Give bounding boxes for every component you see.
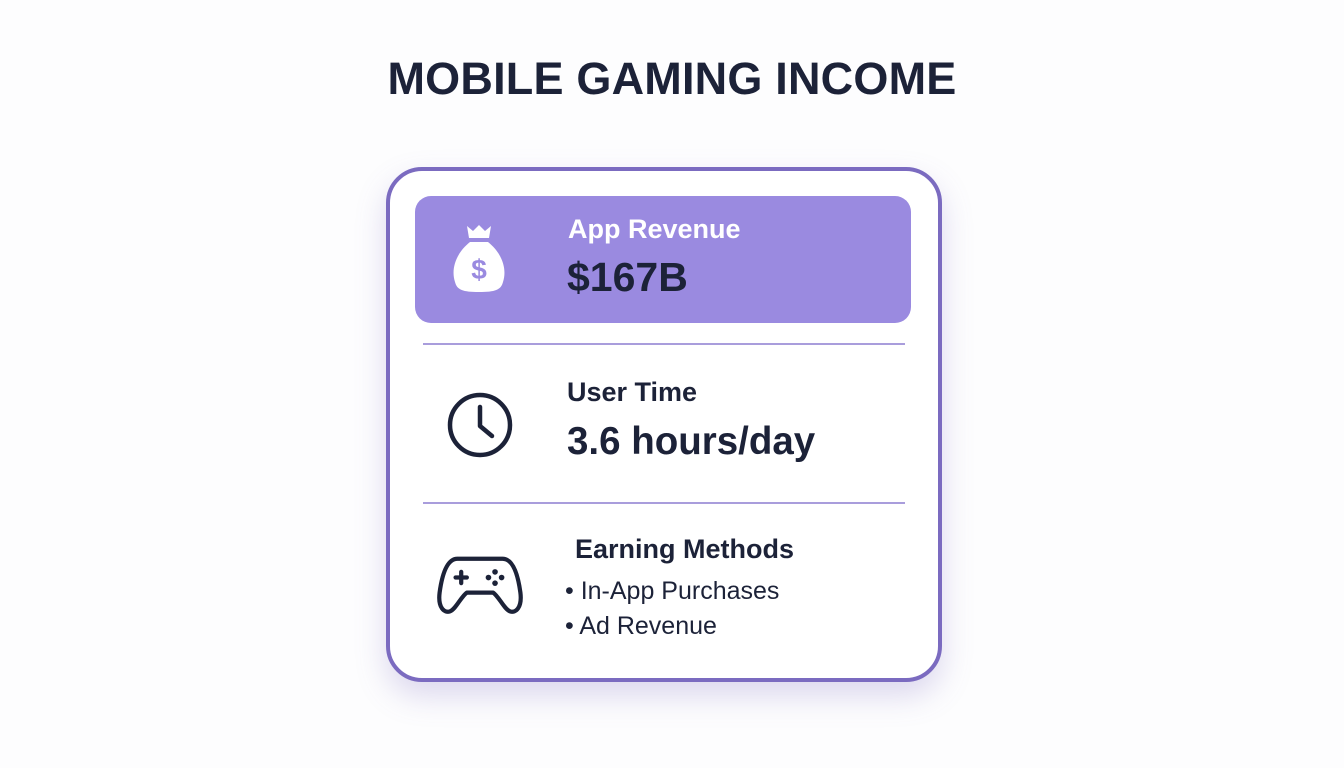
value: hours: 3.6 hours/day <box>567 420 815 463</box>
label: earning methods: Earning Methods <box>575 534 794 564</box>
icon: clock <box>448 392 512 458</box>
label: user time: User Time <box>567 377 697 407</box>
label: App Revenue <box>568 214 741 244</box>
title: MOBILE GAMING INCOME <box>388 53 956 104</box>
icon: money bag: $ <box>471 254 487 285</box>
bullet list: • In-App Purchases <box>565 577 779 605</box>
value: $167B <box>567 254 688 300</box>
bullet list <box>565 577 779 640</box>
icon: gamepad <box>437 556 523 614</box>
icon: money bag <box>454 225 504 292</box>
bullet list: • Ad Revenue <box>565 612 717 640</box>
panel: card <box>386 167 942 682</box>
panel: app revenue <box>415 196 911 323</box>
